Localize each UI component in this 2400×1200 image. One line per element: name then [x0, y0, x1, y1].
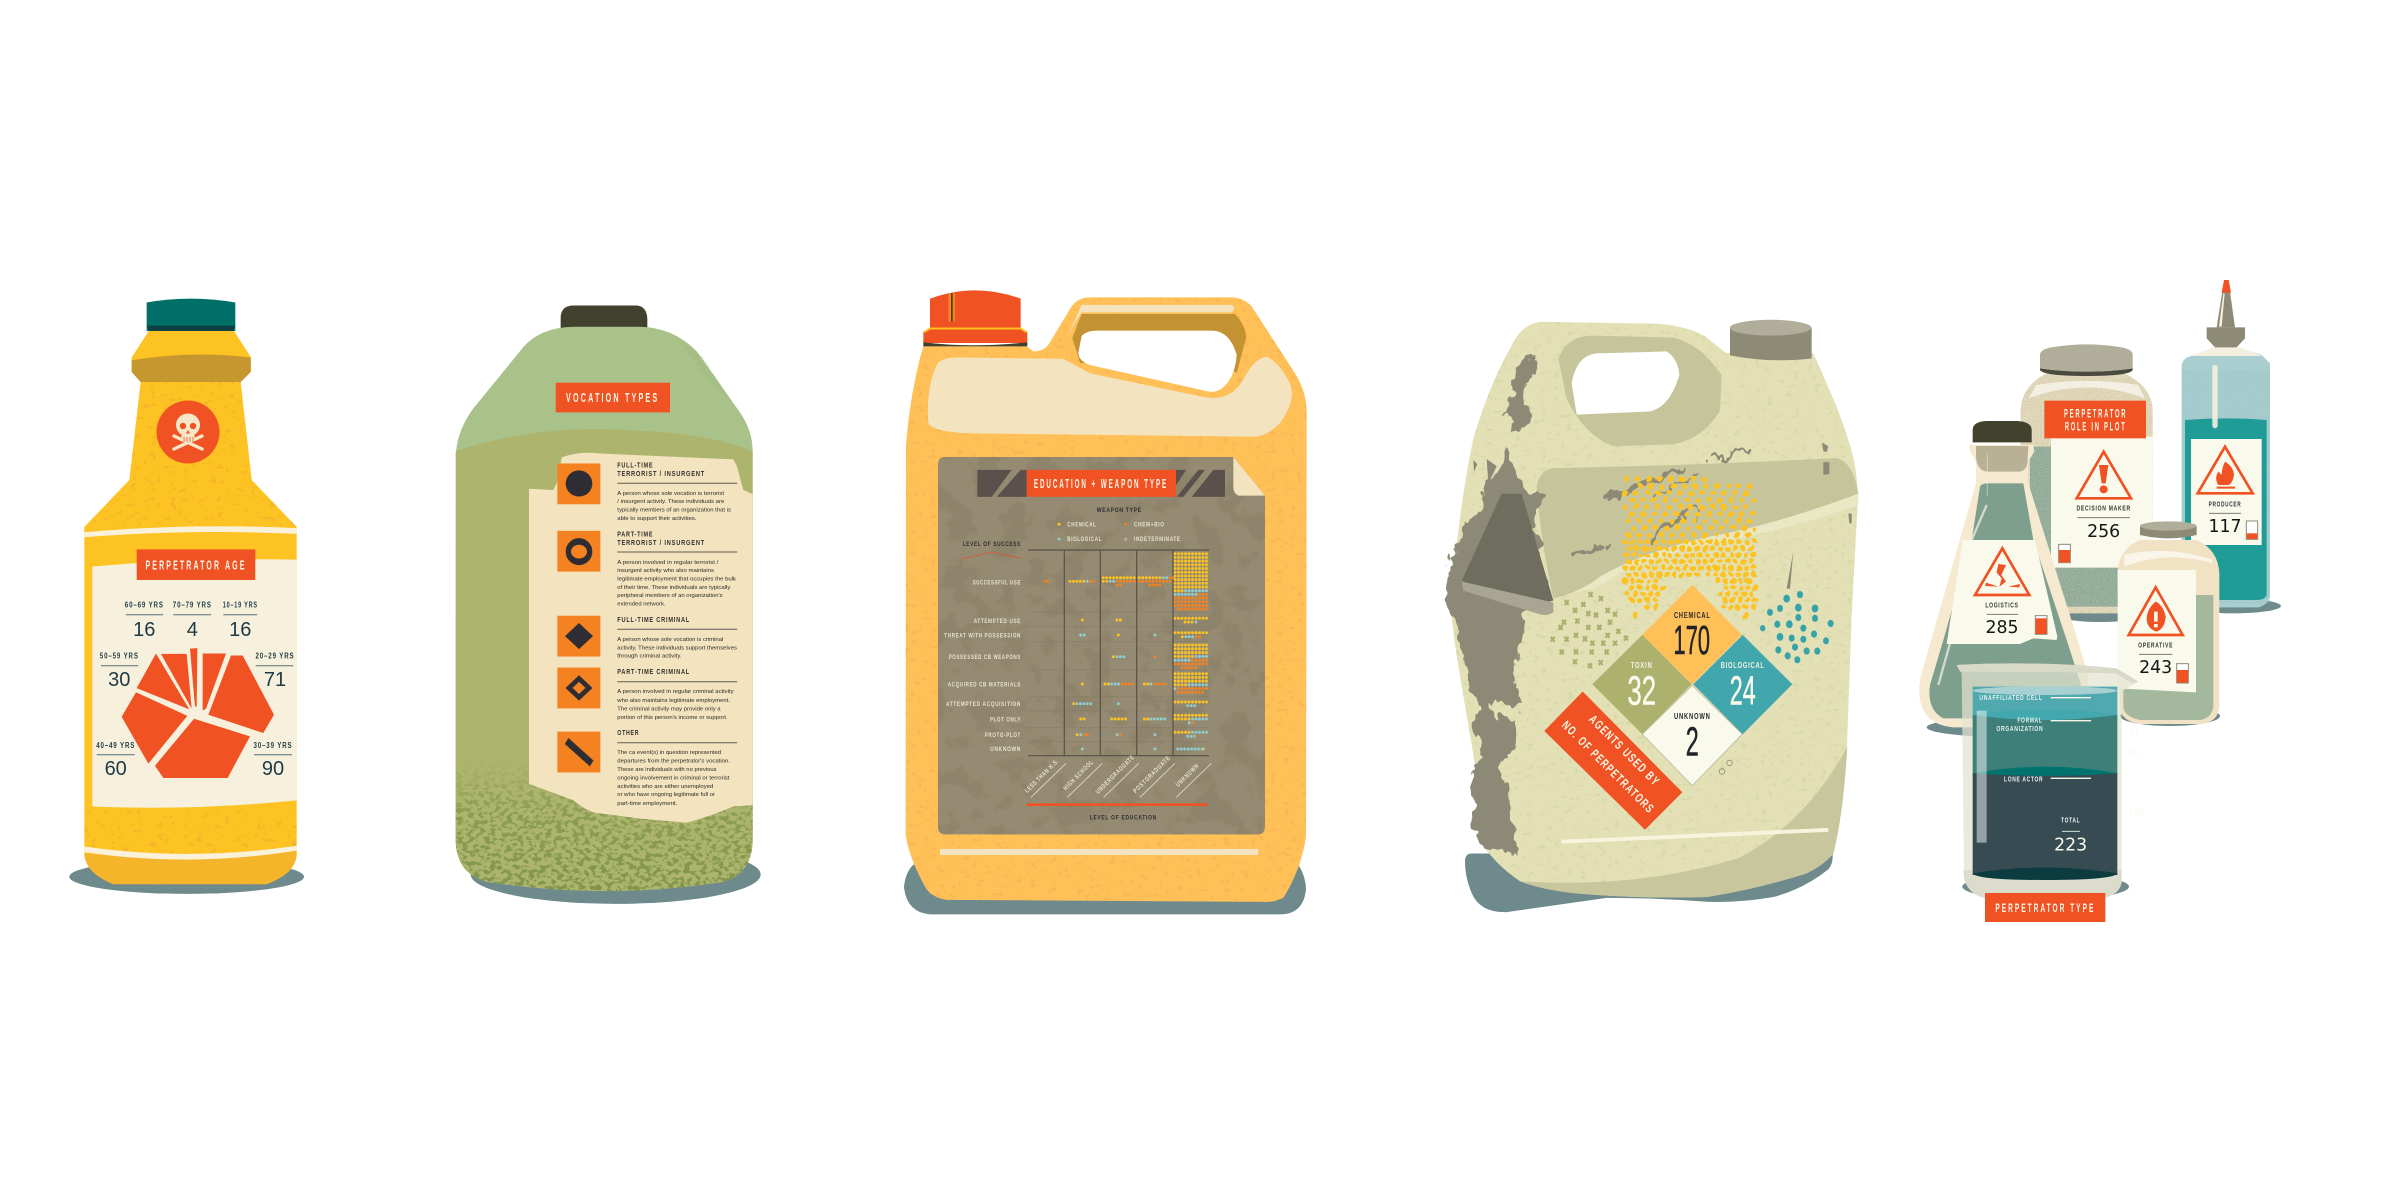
- chart: dot matrix of education by success level: [1028, 550, 1209, 756]
- chart axis: level of education: HIGH SCHOOL: [1062, 759, 1095, 792]
- beaker level labels: FORMAL: [2017, 718, 2043, 725]
- chart axis: level of success: ATTEMPTED USE: [974, 618, 1021, 625]
- beaker level labels: LONE ACTOR: [2004, 776, 2043, 783]
- text block: full-time terrorist: TERRORIST / INSURGENT: [617, 469, 705, 478]
- text block: full-time terrorist: able to support their activities.: [617, 516, 697, 522]
- diamond: chemical 170: CHEMICAL: [1674, 611, 1711, 620]
- chart axis: level of success: THREAT WITH POSSESSION: [944, 632, 1021, 640]
- text block: full-time terrorist: FULL-TIME: [617, 460, 653, 470]
- dots: biological agents scatter: [1760, 591, 1834, 663]
- icon: grey jug cap: [1730, 320, 1812, 360]
- bottle: operative: OPERATIVE: [2138, 642, 2173, 649]
- panel: perpetrator age bottle: [69, 299, 304, 894]
- text block: full-time criminal: A person whose sole vocation is criminal: [617, 637, 723, 643]
- chart legend: weapon type: WEAPON TYPE: [1097, 507, 1142, 514]
- title: education + weapon type with hazard stripes: [977, 470, 1225, 497]
- banner: agents used by number of perpetrators: AGENTS USED BY: [1586, 712, 1663, 789]
- diamond: toxin 32: [1592, 635, 1692, 734]
- text block: part-time terrorist: extended network.: [617, 601, 666, 607]
- chart axis: level of success: UNKNOWN: [990, 746, 1021, 753]
- chart legend: weapon type: INDETERMINATE: [1134, 536, 1181, 543]
- chart axis: level of success: SUCCESSFUL USE: [973, 580, 1021, 586]
- text block: full-time terrorist: / insurgent activity. These individuals are: [617, 499, 724, 505]
- icon: full-time criminal diamond: [557, 616, 600, 657]
- text block: other: The ca event(s) in question represented: [617, 750, 721, 756]
- jug shape: [904, 297, 1307, 914]
- bottle shape: [69, 299, 304, 894]
- text block: full-time criminal: through criminal activity.: [617, 653, 682, 659]
- text block: part-time criminal: PART-TIME CRIMINAL: [617, 667, 690, 676]
- text block: full-time criminal: [617, 615, 737, 659]
- bottle: operative: [2118, 521, 2220, 726]
- text block: part-time terrorist: TERRORIST / INSURGENT: [617, 538, 705, 547]
- title: vocation types: [556, 383, 670, 412]
- text block: part-time terrorist: A person involved in regular terrorist /: [617, 560, 719, 566]
- faint beaker values: 126: [2129, 807, 2144, 817]
- dots: chemical agents scatter: [1625, 479, 1760, 616]
- chart axis: level of education: [1024, 754, 1211, 822]
- age labels and values: 71: [264, 669, 286, 691]
- panel: vocation types bottle: [456, 306, 761, 904]
- chart axis: level of education: POSTGRADUATE: [1132, 755, 1172, 795]
- title: perpetrator role in plot: [2044, 401, 2146, 438]
- chart legend: weapon type: CHEMICAL: [1067, 522, 1097, 528]
- panel: perpetrator role bottles and type beaker: [1919, 280, 2281, 922]
- text block: full-time terrorist: typically members of an organization that is: [617, 508, 731, 514]
- chart panel background: [938, 457, 1265, 834]
- banner: agents used by number of perpetrators: [1544, 692, 1682, 830]
- text block: other: part-time employment.: [617, 801, 678, 807]
- age labels and values: 20–29 YRS: [256, 652, 294, 661]
- jug shape: [1445, 322, 1858, 912]
- text block: part-time terrorist: peripheral members of an organization's: [617, 593, 723, 599]
- bottle: decision maker: DECISION MAKER: [2076, 506, 2131, 513]
- chart axis: level of education: LEVEL OF EDUCATION: [1090, 814, 1157, 822]
- faint beaker values: [2129, 727, 2144, 817]
- age labels and values: 90: [262, 758, 284, 780]
- icon: red jug cap: [923, 290, 1027, 346]
- banner: agents used by number of perpetrators: NO. OF PERPETRATORS: [1559, 718, 1657, 816]
- diamond: unknown 2: UNKNOWN: [1674, 712, 1711, 721]
- diamond: chemical 170: [1642, 585, 1742, 684]
- icon: part-time terrorist ring: [557, 531, 600, 572]
- bottle: decision maker: 256: [2087, 522, 2120, 542]
- text block: part-time criminal: The criminal activity may provide only a: [617, 706, 722, 712]
- chart legend: weapon type: [1058, 507, 1181, 543]
- age labels and values: 50–59 YRS: [100, 652, 139, 661]
- age labels and values: 60–69 YRS: [125, 601, 164, 610]
- age labels and values: 60: [105, 758, 127, 780]
- text block: full-time criminal: FULL-TIME CRIMINAL: [617, 615, 690, 624]
- title: perpetrator type: [1985, 893, 2105, 922]
- diamond: biological 24: [1693, 635, 1792, 734]
- chart: hexagonal age pie: [122, 648, 274, 778]
- text block: full-time criminal: activity. These individuals support themselves: [617, 645, 737, 651]
- age labels and values: 40–49 YRS: [96, 741, 135, 750]
- text block: part-time criminal: who also maintains legitimate employment.: [616, 698, 730, 704]
- age labels and values: 10–19 YRS: [223, 601, 258, 610]
- beaker level labels: TOTAL: [2061, 818, 2080, 825]
- title: perpetrator age: PERPETRATOR AGE: [146, 558, 246, 572]
- chart legend: weapon type: BIOLOGICAL: [1067, 536, 1102, 543]
- title: vocation types: VOCATION TYPES: [566, 390, 659, 405]
- text block: part-time terrorist: insurgent activity who also maintains: [617, 568, 714, 574]
- chart axis: level of success: ATTEMPTED ACQUISITION: [946, 701, 1021, 708]
- beaker: perpetrator type: [1957, 663, 2144, 900]
- text block: part-time terrorist: of their time. These individuals are typically: [617, 585, 731, 591]
- bottle: producer: PRODUCER: [2209, 501, 2241, 508]
- title: perpetrator role in plot: PERPETRATOR: [2064, 408, 2127, 421]
- panel: education and weapon type jug: [904, 290, 1307, 914]
- text block: other: activities who are either unemployed: [617, 784, 713, 790]
- beaker level labels: ORGANIZATION: [1996, 726, 2043, 733]
- bottle: operative: 243: [2139, 658, 2172, 678]
- age labels and values: 30–39 YRS: [254, 741, 292, 750]
- title: perpetrator type: PERPETRATOR TYPE: [1995, 902, 2095, 915]
- text block: other: ongoing involvement in criminal or terrorist: [617, 775, 730, 781]
- text block: part-time terrorist: legitimate employment that occupies the bulk: [617, 576, 736, 582]
- text block: full-time terrorist: A person whose sole vocation is terrorist: [617, 491, 724, 497]
- icon: other bar: [557, 732, 600, 772]
- text block: part-time criminal: [616, 667, 737, 721]
- chart axis: level of success: [944, 541, 1021, 753]
- diamond: unknown 2: [1642, 686, 1742, 786]
- diamond: biological 24: 24: [1730, 667, 1756, 713]
- chart axis: level of education: LESS THAN H.S.: [1024, 758, 1061, 795]
- bottle: producer: 117: [2208, 517, 2242, 537]
- diamond: toxin 32: 32: [1627, 667, 1656, 713]
- text block: other: or who have ongoing legitimate full or: [617, 792, 715, 798]
- title: perpetrator role in plot: ROLE IN PLOT: [2065, 420, 2126, 433]
- bottle: decision maker: [2021, 344, 2153, 622]
- title: education + weapon type with hazard stripes: EDUCATION + WEAPON TYPE: [1034, 476, 1168, 491]
- chart axis: level of education: UNKNOWN: [1175, 762, 1201, 789]
- chart legend: weapon type: CHEM+BIO: [1134, 522, 1165, 528]
- diamond: unknown 2: 2: [1686, 719, 1699, 765]
- panel: agents used jug: [1445, 320, 1858, 912]
- chart axis: level of education: UNDERGRADUATE: [1095, 754, 1136, 796]
- faint beaker values: 27: [2129, 727, 2139, 737]
- text block: other: [617, 728, 737, 807]
- age labels and values: 16: [229, 619, 251, 641]
- chart axis: level of success: ACQUIRED CB MATERIALS: [948, 682, 1021, 688]
- icon: full-time terrorist circle: [557, 463, 600, 504]
- age labels and values: 70–79 YRS: [173, 601, 212, 610]
- beaker level labels: UNAFFILIATED CELL: [1979, 695, 2043, 702]
- bottle: logistics flask: LOGISTICS: [1985, 602, 2019, 609]
- faint beaker values: 70: [2129, 748, 2139, 758]
- age labels and values: 4: [187, 619, 198, 641]
- diamond: biological 24: BIOLOGICAL: [1721, 661, 1765, 670]
- chart axis: level of success: LEVEL OF SUCCESS: [963, 541, 1021, 548]
- beaker level labels: [1979, 695, 2091, 855]
- bottle shape: [456, 306, 761, 904]
- age labels and values: 30: [108, 669, 130, 691]
- beaker level labels: 223: [2054, 835, 2087, 855]
- age labels and values: [96, 601, 294, 780]
- text block: other: These are individuals with no previous: [617, 767, 717, 773]
- icon: part-time criminal diamond outline: [557, 668, 600, 708]
- text block: other: OTHER: [617, 728, 639, 737]
- text block: part-time criminal: portion of this person's income or support.: [617, 715, 728, 721]
- chart axis: level of success: PLOT ONLY: [990, 716, 1021, 724]
- bottle: logistics flask: [1919, 421, 2088, 737]
- text block: part-time criminal: A person involved in regular criminal activity: [617, 689, 734, 695]
- bottle: producer: [2182, 280, 2281, 613]
- text block: part-time terrorist: PART-TIME: [617, 530, 653, 538]
- diamond: chemical 170: 170: [1673, 617, 1710, 663]
- icon: skull and crossbones: [156, 400, 220, 464]
- marks: toxin agents scatter: [1551, 592, 1628, 668]
- text block: part-time terrorist: [617, 530, 737, 607]
- chart axis: level of success: PROTO-PLOT: [985, 732, 1021, 739]
- diamond: toxin 32: TOXIN: [1631, 661, 1653, 670]
- chart axis: level of success: POSSESSED CB WEAPONS: [949, 654, 1021, 661]
- age labels and values: 16: [133, 619, 155, 641]
- bottle: logistics flask: 285: [1985, 618, 2019, 638]
- text block: full-time terrorist: [617, 460, 737, 522]
- text block: other: departures from the perpetrator's vocation.: [617, 758, 730, 764]
- title: perpetrator age: [137, 549, 255, 580]
